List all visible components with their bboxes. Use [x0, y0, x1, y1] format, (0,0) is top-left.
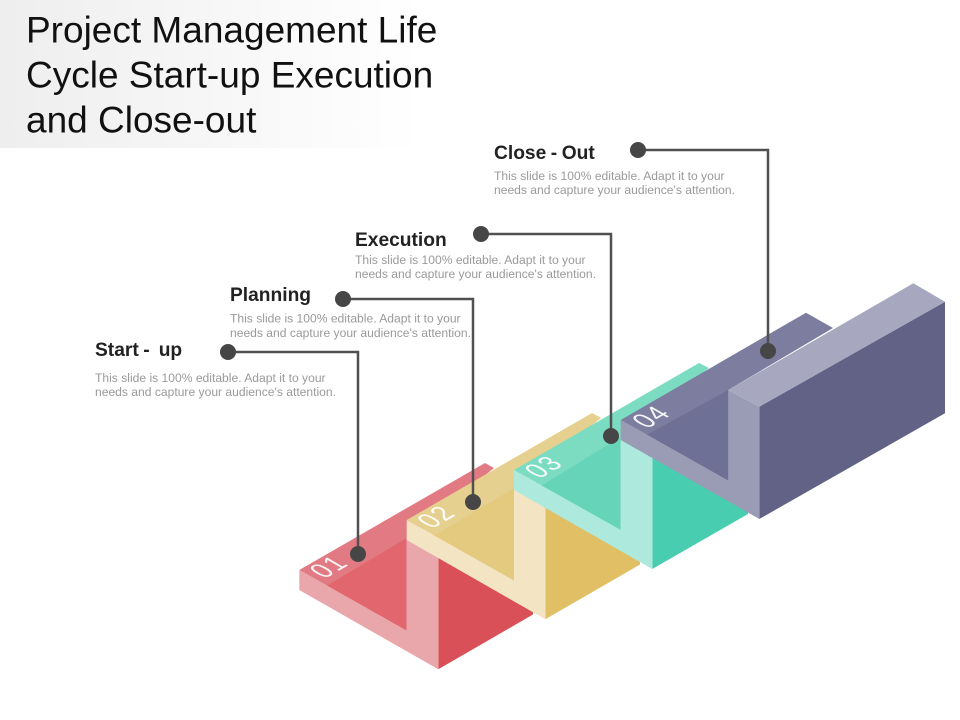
connector: close-out: [630, 142, 776, 359]
text block: start-up: needs and capture your audience's attention.: [95, 385, 336, 399]
step 2: planning block: [407, 413, 640, 619]
title: Project Management Life: [26, 10, 437, 51]
text block: close-out: Close - Out: [494, 143, 595, 164]
text block: start-up: [95, 340, 336, 399]
text block: planning: [230, 285, 471, 340]
title: and Close-out: [26, 100, 257, 140]
text block: planning: Planning: [230, 285, 311, 306]
text block: start-up: Start - up: [95, 340, 182, 361]
text block: execution: [355, 230, 596, 281]
text block: close-out: [494, 143, 735, 197]
text block: planning: needs and capture your audience's attention.: [230, 326, 471, 340]
text block: planning: This slide is 100% editable. Adapt it to your: [230, 312, 461, 326]
text block: start-up: This slide is 100% editable. Adapt it to your: [95, 371, 326, 385]
text block: execution: needs and capture your audience's attention.: [355, 267, 596, 281]
step 4: close-out block: [621, 283, 945, 519]
step 1: start-up block: [299, 463, 533, 669]
title: [0, 0, 437, 148]
connector: start-up: [220, 344, 366, 562]
step 4: close-out block: 04: [624, 401, 678, 432]
step 2: planning block: 02: [409, 501, 463, 532]
connector: planning: [335, 291, 481, 510]
text block: close-out: needs and capture your audience's attention.: [494, 183, 735, 197]
step 3: execution block: [514, 363, 748, 569]
text block: execution: This slide is 100% editable. Adapt it to your: [355, 253, 586, 267]
connector: execution: [473, 226, 619, 444]
step 3: execution block: 03: [517, 451, 571, 482]
text block: close-out: This slide is 100% editable. Adapt it to your: [494, 169, 725, 183]
step 1: start-up block: 01: [302, 551, 356, 582]
text block: execution: Execution: [355, 230, 447, 251]
title: Cycle Start-up Execution: [26, 55, 433, 96]
